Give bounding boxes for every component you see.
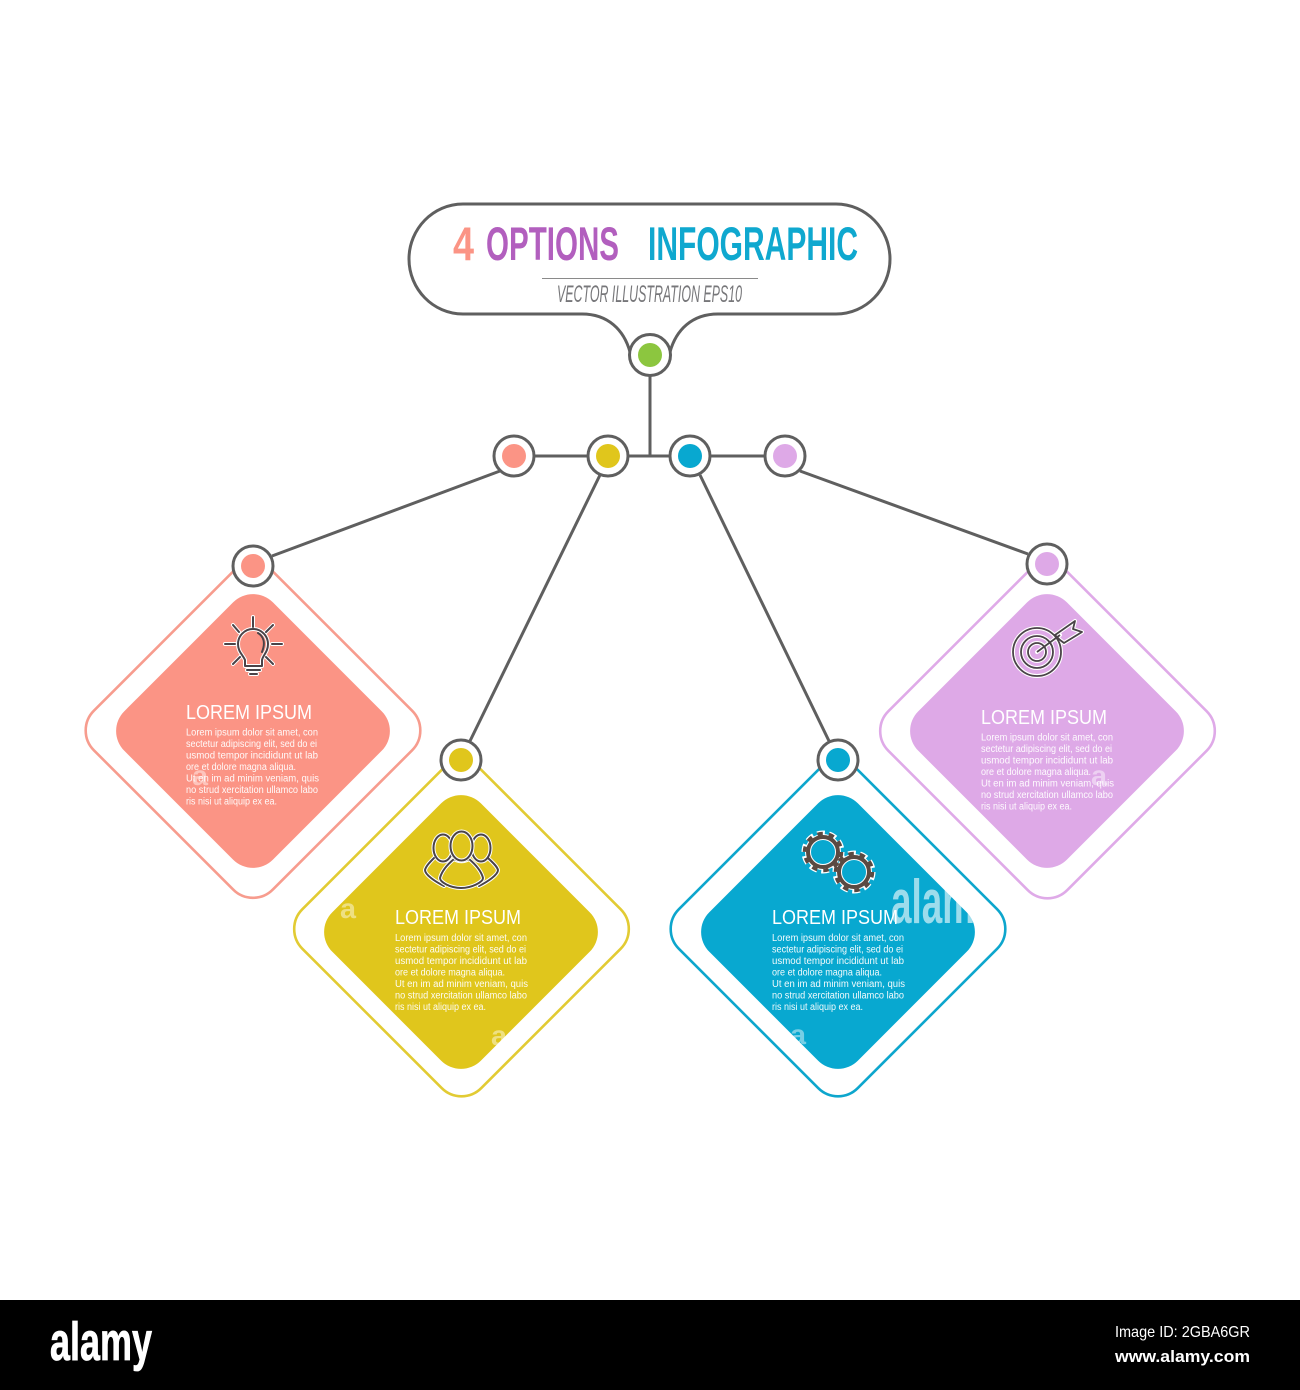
watermark fragments: alam: [891, 868, 975, 937]
text block: blue: Ut en im ad minim veniam, quis: [772, 979, 905, 990]
node: pink panel: [233, 546, 273, 586]
footer image id: Image ID: 2GBA6GR: [1115, 1324, 1250, 1341]
text block: blue: no strud xercitation ullamco labo: [772, 990, 905, 1002]
text block: purple: no strud xercitation ullamco labo: [981, 790, 1114, 801]
text block: pink: ris nisi ut aliquip ex ea.: [186, 796, 277, 808]
text block: blue: sectetur adipiscing elit, sed do ei: [772, 944, 903, 956]
watermark fragments: [192, 760, 1107, 1051]
panel: yellow option: [283, 750, 640, 1108]
title callout: [409, 204, 890, 352]
text block: blue: ore et dolore magna aliqua.: [772, 968, 882, 978]
heading: yellow: LOREM IPSUM: [395, 907, 521, 929]
divider: [542, 278, 758, 279]
node: blue hub: [670, 436, 710, 476]
watermark fragments: a: [192, 760, 208, 791]
title: infographic: INFOGRAPHIC: [648, 217, 858, 270]
text block: pink: Lorem ipsum dolor sit amet, con: [186, 728, 318, 738]
node: yellow hub: [588, 436, 628, 476]
icon: people: [425, 832, 498, 888]
icon: light bulb: [225, 617, 282, 674]
node: purple panel: [1027, 544, 1067, 584]
text block: yellow: usmod tempor incididunt ut lab: [395, 956, 528, 967]
text block: yellow: ris nisi ut aliquip ex ea.: [395, 1002, 486, 1013]
text block: pink: no strud xercitation ullamco labo: [186, 785, 319, 796]
icon: target with arrow: [1013, 621, 1082, 676]
node: green top: [630, 334, 670, 376]
watermark fragments: a: [790, 1019, 806, 1050]
watermark fragments: a: [491, 1020, 507, 1051]
panel: blue option: [659, 750, 1017, 1108]
pink diamond fill: [105, 583, 401, 879]
icon: gears: [804, 834, 872, 890]
text block: yellow: [395, 933, 528, 1013]
watermark fragments: a: [340, 893, 356, 924]
purple diamond fill: [899, 583, 1195, 879]
heading: blue: LOREM IPSUM: [772, 907, 898, 929]
node: pink hub: [494, 436, 534, 476]
footer bar: [0, 1300, 1300, 1390]
text block: yellow: Lorem ipsum dolor sit amet, con: [395, 933, 527, 944]
text block: purple: ore et dolore magna aliqua.: [981, 767, 1091, 778]
text block: yellow: ore et dolore magna aliqua.: [395, 968, 505, 978]
watermark fragments: a: [1091, 760, 1107, 791]
node: yellow panel: [441, 740, 481, 780]
text block: pink: [186, 728, 319, 808]
text block: purple: Ut en im ad minim veniam, quis: [981, 778, 1114, 790]
node: blue panel: [818, 740, 858, 780]
heading: pink: LOREM IPSUM: [186, 702, 312, 724]
connector lines: [272, 376, 1028, 741]
text block: purple: [981, 732, 1114, 812]
panel: purple option: [869, 552, 1226, 910]
text block: blue: ris nisi ut aliquip ex ea.: [772, 1002, 863, 1013]
text block: blue: [772, 933, 905, 1013]
text block: blue: usmod tempor incididunt ut lab: [772, 956, 905, 967]
text block: pink: Ut en im ad minim veniam, quis: [186, 774, 319, 784]
subtitle: VECTOR ILLUSTRATION EPS10: [557, 281, 742, 308]
footer url: www.alamy.com: [1114, 1347, 1250, 1366]
text block: pink: sectetur adipiscing elit, sed do ei: [186, 739, 317, 750]
text block: yellow: Ut en im ad minim veniam, quis: [395, 979, 528, 990]
text block: blue: Lorem ipsum dolor sit amet, con: [772, 933, 904, 944]
text block: purple: Lorem ipsum dolor sit amet, con: [981, 732, 1113, 744]
node: purple hub: [765, 436, 805, 476]
title: 4: 4: [453, 217, 474, 270]
blue diamond fill: [690, 784, 986, 1080]
title: options: OPTIONS: [486, 217, 619, 270]
footer logo: alamy: [50, 1312, 152, 1372]
text block: purple: ris nisi ut aliquip ex ea.: [981, 802, 1072, 812]
yellow diamond fill: [313, 784, 609, 1080]
text block: yellow: no strud xercitation ullamco labo: [395, 990, 528, 1002]
panel: pink option: [74, 552, 432, 909]
text block: pink: usmod tempor incididunt ut lab: [186, 750, 319, 762]
text block: purple: usmod tempor incididunt ut lab: [981, 756, 1114, 766]
text block: purple: sectetur adipiscing elit, sed do ei: [981, 744, 1112, 755]
text block: pink: ore et dolore magna aliqua.: [186, 762, 296, 773]
heading: purple: LOREM IPSUM: [981, 707, 1107, 729]
text block: yellow: sectetur adipiscing elit, sed do ei: [395, 944, 526, 956]
